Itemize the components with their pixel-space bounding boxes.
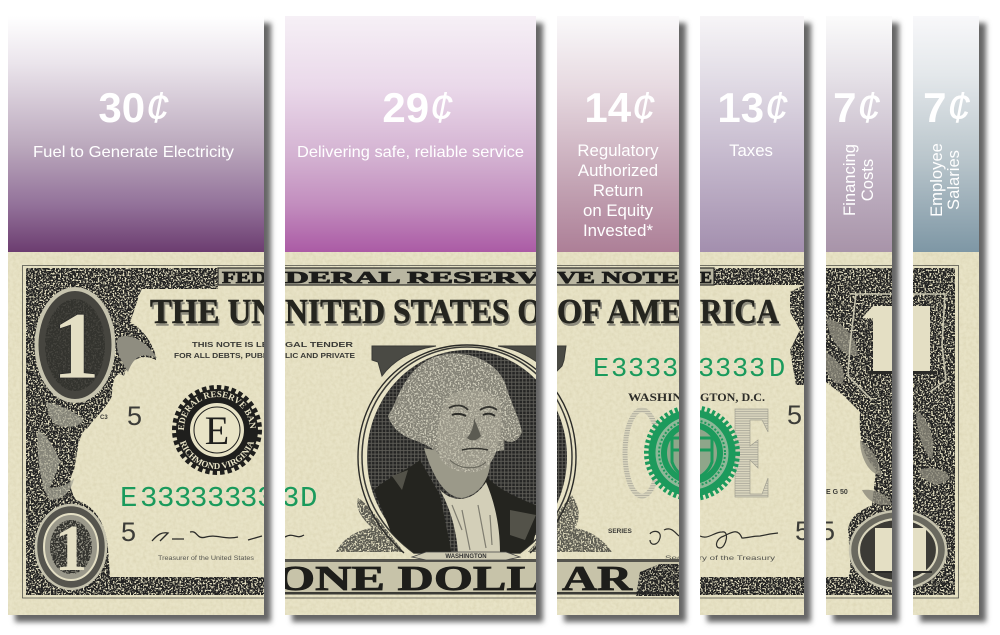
top band: Federal Reserve Note: FED	[222, 268, 267, 287]
upper left oval with 1: 1	[52, 292, 100, 399]
second serial number: 3333D	[698, 355, 785, 385]
place: Washington, D.C.: GTON, D.C.	[700, 390, 765, 404]
label: return on equity: Regulatory	[577, 141, 659, 160]
panel: taxes strip, 13 cents	[700, 16, 811, 622]
amount: 13 cents: 13¢	[717, 83, 789, 132]
label: return on equity: Return	[593, 181, 643, 200]
label: delivery: Delivering safe, reliable service	[297, 144, 524, 161]
ghost letters: ONE	[625, 409, 768, 497]
heading: The United States of America: NITED STATES O	[285, 292, 542, 331]
signature, secretary: Secretary of the Treasury	[665, 556, 775, 562]
label: return on equity: Invested*	[583, 221, 653, 240]
plate number and check letters, left: 5	[121, 517, 136, 547]
heading: The United States of America: THE UN	[150, 292, 275, 331]
lower left round 1	[36, 505, 106, 589]
bottom band: One Dollar	[285, 559, 679, 596]
face	[437, 390, 502, 472]
top band: Federal Reserve Note: VE NOTE	[557, 268, 679, 287]
plate number and check letters, left: C3	[100, 415, 108, 421]
heading: The United States of America: THE UN	[152, 294, 276, 334]
plate numbers, right: 5	[795, 516, 810, 546]
label: return on equity: Authorized	[578, 161, 658, 180]
big outlined 1, right	[848, 294, 946, 400]
place: Washington, D.C.	[628, 394, 764, 403]
leaf ornament	[117, 336, 157, 372]
plate numbers, right: 5	[787, 400, 802, 430]
label: employee salaries: Employee	[927, 143, 946, 217]
legal tender note: GAL TENDER	[285, 340, 354, 349]
laurel leaves around portrait	[336, 495, 612, 552]
bottom band: One Dollar: ONE DOLL	[276, 559, 540, 598]
amount: 14 cents: 14¢	[584, 83, 656, 132]
portrait: George Washington: WASHINGTON	[445, 554, 487, 560]
green treasury seal	[647, 408, 737, 498]
label: fuel: Fuel to Generate Electricity	[33, 144, 234, 161]
plate number and check letters, left: 5	[127, 401, 142, 431]
bottom band: One Dollar: AR	[562, 559, 633, 598]
signature, secretary	[650, 529, 778, 562]
panel: delivery strip, 29 cents	[285, 16, 543, 622]
lower left round 1: 1	[54, 512, 88, 585]
label: financing costs: Financing	[840, 144, 859, 216]
upper left oval with 1	[36, 289, 114, 401]
plate numbers, right: 5	[820, 516, 835, 546]
label: taxes: Taxes	[729, 141, 773, 160]
amount: 7 cents: 7¢	[833, 83, 881, 132]
series date: SERIES	[608, 528, 633, 535]
left engraved border	[26, 268, 264, 595]
label: employee salaries: Salaries	[944, 150, 963, 210]
plate number and check letters, left	[100, 401, 142, 547]
right engraved border	[700, 268, 955, 595]
panel: salaries strip, 7 cents	[913, 16, 986, 622]
legal tender note	[174, 342, 355, 360]
legal tender note: LIC AND PRIVATE	[285, 351, 355, 360]
legal tender note: THIS NOTE IS LE	[192, 340, 268, 349]
amount: 7 cents: 7¢	[923, 83, 971, 132]
panel: financing strip, 7 cents	[826, 16, 899, 622]
label: return on equity: on Equity	[583, 201, 654, 220]
heading: The United States of America: NITED STATES O	[286, 294, 544, 334]
top band: Federal Reserve Note: E	[700, 268, 712, 287]
heading: The United States of America	[150, 300, 780, 326]
top band: Federal Reserve Note	[218, 268, 714, 287]
coat	[374, 460, 542, 555]
portrait frame corners	[372, 346, 566, 376]
signature, treasurer: Treasurer of the United States	[158, 556, 254, 562]
heading: The United States of America: RICA	[700, 292, 780, 331]
heading: The United States of America: OF AME	[557, 292, 682, 331]
label: financing costs: Costs	[858, 159, 877, 201]
second serial number	[595, 358, 784, 376]
seal: Federal Reserve Bank of Richmond: E	[205, 408, 229, 453]
signature, treasurer	[152, 532, 304, 562]
legal tender note: FOR ALL DEBTS, PUBL	[174, 351, 268, 360]
seal: Federal Reserve Bank of Richmond: RICHMOND VIRGINIA	[180, 440, 254, 469]
heading: The United States of America: RICA	[702, 294, 781, 334]
portrait: George Washington	[358, 345, 576, 564]
right leaves	[826, 318, 950, 505]
neck	[424, 448, 490, 498]
panel: return on equity strip, 14 cents	[557, 16, 686, 622]
plate numbers, right: E G 50	[826, 489, 848, 496]
dollar bill artwork, cut across the strips	[8, 252, 979, 615]
place: Washington, D.C.: WASHIN	[628, 390, 682, 404]
amount: 30 cents: 30¢	[98, 83, 170, 132]
amount: 29 cents: 29¢	[382, 83, 454, 132]
panel: fuel strip, 30 cents	[8, 16, 271, 622]
cravat	[440, 482, 500, 552]
second serial number: E3333	[593, 355, 678, 385]
serial number, left: E333333333D	[120, 482, 317, 515]
hair	[388, 354, 522, 460]
top band: Federal Reserve Note: DERAL RESERV	[285, 268, 541, 287]
lower right round 1	[850, 511, 946, 589]
seal: Federal Reserve Bank of Richmond	[172, 385, 262, 475]
heading: The United States of America: OF AME	[558, 294, 684, 334]
plate numbers, right	[787, 400, 848, 546]
